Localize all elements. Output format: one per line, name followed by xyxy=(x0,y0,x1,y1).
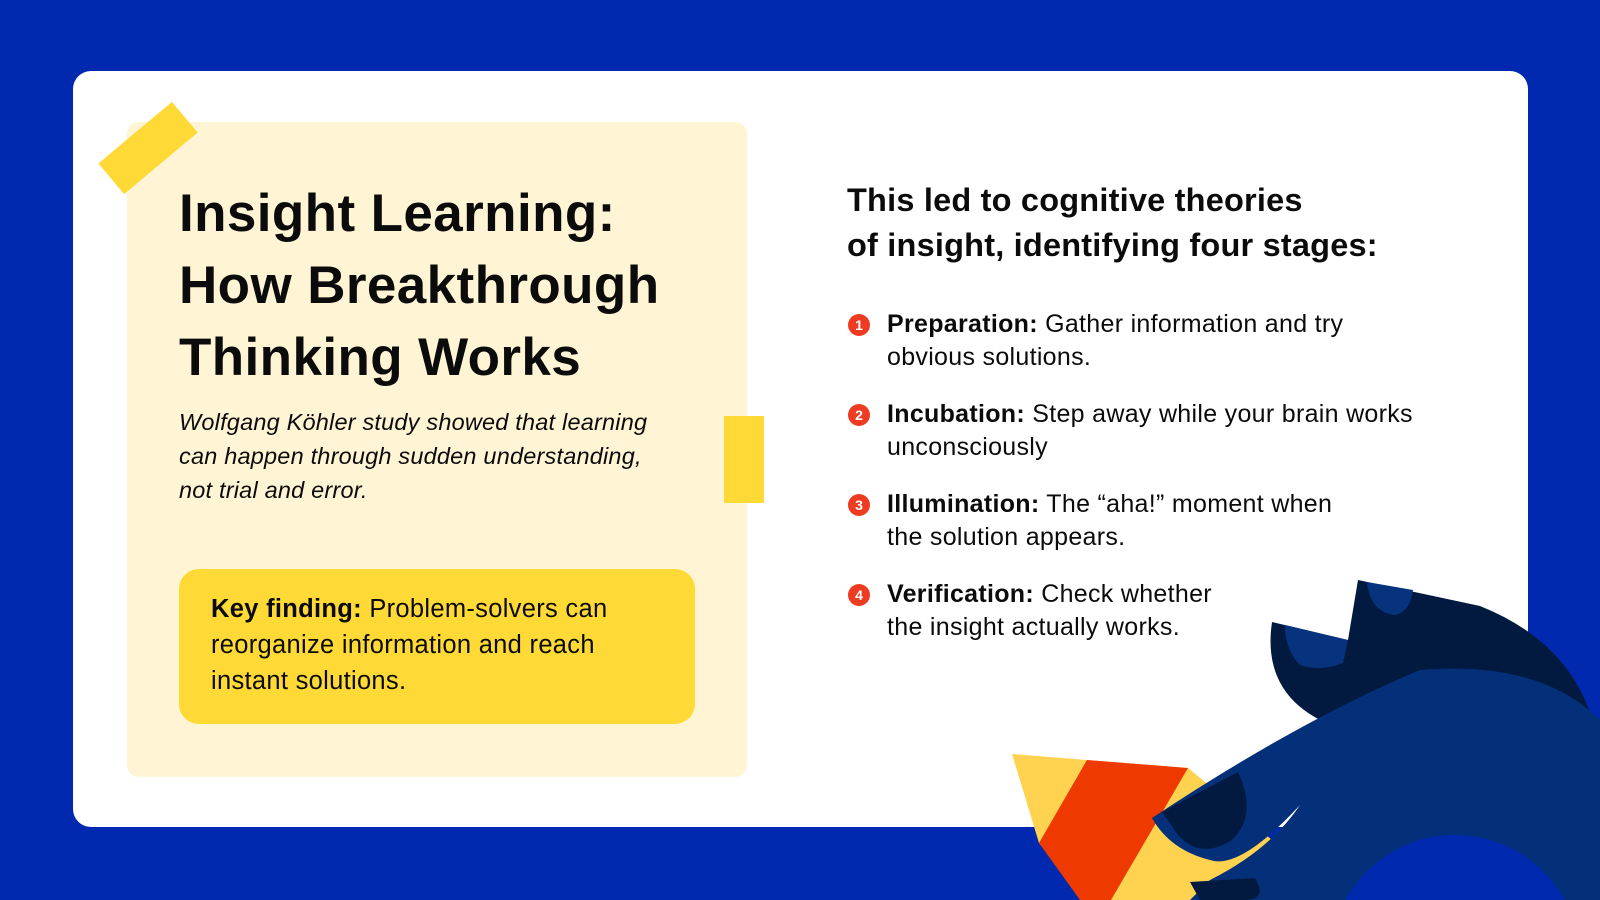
subtitle xyxy=(179,409,647,503)
stage 4 xyxy=(848,580,1212,641)
stage 1: obvious solutions. xyxy=(887,343,1091,371)
title: Insight Learning: xyxy=(179,184,616,243)
list: stages xyxy=(848,310,1413,641)
stage 4: the insight actually works. xyxy=(887,613,1180,641)
stage 2: unconsciously xyxy=(887,433,1048,461)
stage 3: the solution appears. xyxy=(887,523,1125,551)
pencil xyxy=(1012,754,1400,900)
subtitle: Wolfgang Köhler study showed that learning xyxy=(179,409,647,435)
callout: key finding: instant solutions. xyxy=(211,667,406,695)
callout: key finding: reorganize information and reach xyxy=(211,631,595,659)
tape: top-left xyxy=(98,102,198,194)
back fingers xyxy=(1271,580,1600,900)
subtitle: can happen through sudden understanding, xyxy=(179,443,642,469)
panel: yellow note xyxy=(127,122,747,777)
tape: right xyxy=(724,416,764,503)
heading: four stages: This led to cognitive theories xyxy=(847,182,1303,218)
stage 3 xyxy=(848,490,1332,551)
callout: key finding xyxy=(179,569,695,724)
subtitle: not trial and error. xyxy=(179,477,368,503)
list: stages: 2 xyxy=(855,407,863,423)
heading: four stages xyxy=(847,182,1378,263)
stage 1 xyxy=(848,310,1343,371)
stage 2: Incubation: Step away while your brain works xyxy=(887,400,1413,428)
list: stages: 1 xyxy=(855,317,863,333)
stage 2 xyxy=(848,400,1413,461)
title: How Breakthrough xyxy=(179,256,659,315)
stage 4: Verification: Check whether xyxy=(887,580,1212,608)
list: stages: 3 xyxy=(855,497,863,513)
title xyxy=(179,184,659,387)
stage 1: Preparation: Gather information and try xyxy=(887,310,1343,338)
callout: key finding: Key finding: Problem-solvers can xyxy=(211,595,607,623)
title: Thinking Works xyxy=(179,328,581,387)
white card xyxy=(73,71,1528,827)
stage 3: Illumination: The “aha!” moment when xyxy=(887,490,1332,518)
hand xyxy=(1152,669,1600,900)
list: stages: 4 xyxy=(855,587,863,603)
heading: four stages: of insight, identifying four stages: xyxy=(847,227,1378,263)
